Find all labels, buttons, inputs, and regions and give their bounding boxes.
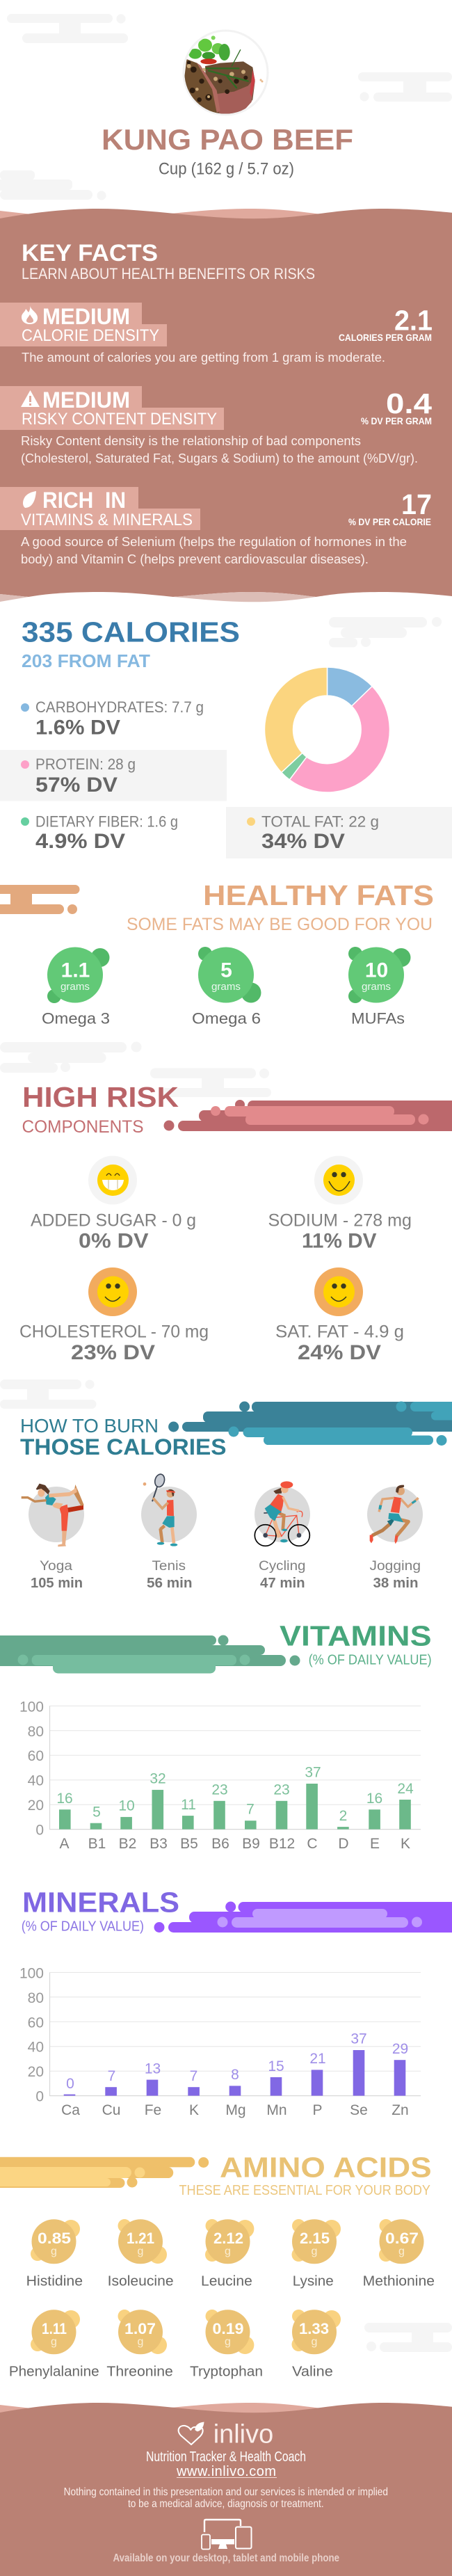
fat: omega 3: Omega 3 — [42, 1010, 110, 1027]
fat: omega 3 — [42, 947, 110, 1027]
decoration: purple cloud — [154, 1902, 452, 1933]
component: added sugar: ADDED SUGAR - 0 g — [31, 1210, 196, 1230]
amino: isoleucine: g — [138, 2246, 143, 2257]
chart: minerals bar chart: Fe — [145, 2102, 161, 2118]
heading: how to burn: HOW TO BURN — [20, 1415, 159, 1437]
panel: key facts — [0, 209, 452, 602]
amino: leucine: Leucine — [201, 2273, 252, 2289]
chart: minerals bar chart: 8 — [231, 2067, 239, 2083]
amino: phenylalanine: g — [51, 2336, 57, 2348]
chart: vitamins bar chart: D — [338, 1836, 349, 1852]
panel: calories — [0, 616, 452, 858]
availability note: Available on your desktop, tablet and mobile phone — [113, 2552, 339, 2564]
legend: carbohydrates: CARBOHYDRATES: 7.7 g — [35, 698, 204, 716]
chart: vitamins bar chart: 16 — [366, 1791, 382, 1807]
chart: minerals bar chart: Zn — [392, 2102, 409, 2118]
chart: vitamins bar chart: 80 — [28, 1724, 44, 1740]
amino: tryptophan — [190, 2310, 263, 2379]
fat: omega 6: 5 — [220, 959, 232, 982]
heading: minerals: MINERALS — [22, 1887, 179, 1919]
legend: protein — [0, 750, 227, 801]
activity: yoga: 105 min — [31, 1576, 83, 1591]
amino: valine: Valine — [292, 2364, 333, 2379]
amino: phenylalanine — [9, 2310, 99, 2379]
amino: tryptophan: Tryptophan — [190, 2364, 263, 2379]
chart: vitamins bar chart: 23 — [211, 1782, 228, 1798]
amino: lysine — [292, 2219, 341, 2289]
unit: % DV PER GRAM — [361, 415, 432, 426]
description: A good source of Selenium (helps the regulation of hormones in the — [21, 535, 407, 549]
label: risky content density: RISKY CONTENT DENSITY — [22, 410, 217, 429]
header: food photo — [184, 31, 268, 115]
amino: phenylalanine: Phenylalanine — [9, 2364, 99, 2379]
activity: jogging: 38 min — [373, 1576, 419, 1591]
chart: minerals bar chart: Ca — [61, 2102, 80, 2118]
legend: carbohydrates: 1.6% DV — [35, 717, 120, 739]
chart: vitamins bar chart: 7 — [246, 1802, 255, 1817]
amino: threonine: 1.07 — [124, 2320, 156, 2337]
chart: vitamins bar chart: E — [370, 1836, 380, 1852]
amino: lysine: 2.15 — [300, 2230, 330, 2247]
subheading: key facts: LEARN ABOUT HEALTH BENEFITS OR RISKS — [22, 265, 315, 282]
panel: high risk components — [19, 1081, 452, 1364]
unit: % DV PER CALORIE — [348, 516, 431, 527]
chart: vitamins bar chart: 40 — [28, 1773, 44, 1789]
legend: protein: 57% DV — [35, 774, 118, 797]
legend: total fat — [226, 807, 452, 858]
icon: flame — [22, 305, 38, 324]
amino: leucine: 2.12 — [213, 2230, 243, 2247]
heading: healthy fats: HEALTHY FATS — [203, 879, 434, 911]
activity: jogging — [367, 1485, 423, 1591]
heading: vitamins: VITAMINS — [280, 1620, 432, 1652]
amino: methionine: 0.67 — [385, 2230, 419, 2247]
activity: jogging: Jogging — [370, 1559, 421, 1574]
amino: isoleucine: 1.21 — [127, 2230, 154, 2247]
chart: minerals bar chart: 7 — [108, 2068, 115, 2084]
chart: minerals bar chart: P — [312, 2102, 323, 2118]
component: saturated fat: 24% DV — [298, 1341, 381, 1364]
tagline: Nutrition Tracker & Health Coach — [146, 2449, 306, 2465]
subheading: from fat: 203 FROM FAT — [22, 650, 150, 671]
legend: protein: PROTEIN: 28 g — [35, 755, 136, 773]
chart: vitamins bar chart: 100 — [19, 1699, 44, 1715]
title: KUNG PAO BEEF — [102, 123, 353, 156]
fact: calorie density — [0, 303, 433, 365]
description: body) and Vitamin C (helps prevent cardiovascular diseases). — [21, 552, 369, 566]
amino: threonine: Threonine — [106, 2364, 173, 2379]
chart: minerals bar chart: 15 — [268, 2058, 284, 2074]
amino: histidine: Histidine — [26, 2273, 83, 2289]
activity: tennis: 56 min — [147, 1576, 192, 1591]
legend: dietary fiber — [21, 813, 178, 853]
heading: those calories: THOSE CALORIES — [20, 1434, 227, 1459]
amino: tryptophan: 0.19 — [213, 2320, 243, 2337]
chart: vitamins bar chart: B5 — [180, 1836, 198, 1852]
decoration: orange cloud — [0, 885, 79, 914]
panel: vitamins — [0, 1620, 432, 1852]
panel: minerals — [19, 1887, 452, 2118]
subheading: SOME FATS MAY BE GOOD FOR YOU — [127, 915, 433, 934]
heading: calories: 335 CALORIES — [22, 616, 240, 648]
heading: key facts: KEY FACTS — [22, 240, 158, 266]
chart: vitamins bar chart: B1 — [88, 1836, 106, 1852]
amino: leucine — [201, 2219, 254, 2289]
chart: minerals bar chart: Mg — [225, 2102, 246, 2118]
chart: minerals bar chart: 0 — [35, 2089, 44, 2105]
chart: minerals bar chart: 37 — [350, 2031, 367, 2047]
decoration: red cloud — [164, 1100, 452, 1131]
chart: vitamins bar chart: B3 — [150, 1836, 168, 1852]
subheading: daily value: (% OF DAILY VALUE) — [309, 1653, 432, 1668]
chart: vitamins bar chart: 32 — [150, 1771, 166, 1786]
fat: omega 6 — [192, 947, 261, 1027]
chart: minerals bar chart — [19, 1965, 421, 2118]
component: sodium: SODIUM - 278 mg — [268, 1210, 412, 1230]
description — [21, 535, 407, 566]
disclaimer: Nothing contained in this presentation and our services is intended or implied — [64, 2486, 388, 2498]
component: sodium — [268, 1156, 412, 1252]
icon: warning — [21, 390, 40, 407]
fat: mufas: 10 — [365, 959, 388, 982]
component: cholesterol — [19, 1267, 209, 1364]
value: 17: 17 — [401, 488, 432, 520]
chart: vitamins bar chart: 0 — [35, 1823, 44, 1839]
subheading: components: COMPONENTS — [22, 1117, 143, 1137]
chart: minerals bar chart: 29 — [392, 2041, 408, 2057]
amino: methionine: g — [398, 2246, 405, 2257]
amino: histidine: g — [51, 2246, 57, 2257]
amino: valine: 1.33 — [299, 2320, 329, 2337]
fat: omega 6: Omega 6 — [192, 1010, 261, 1027]
chart: vitamins bar chart: 24 — [397, 1781, 414, 1797]
amino: methionine: Methionine — [363, 2273, 435, 2289]
icon: steak with greens — [184, 35, 255, 113]
label: calorie density: CALORIE DENSITY — [22, 326, 159, 345]
chart: minerals bar chart: 20 — [28, 2064, 44, 2080]
heading: high risk: HIGH RISK — [22, 1081, 179, 1113]
amino: valine — [292, 2310, 341, 2379]
description: The amount of calories you are getting from 1 gram is moderate. — [22, 351, 385, 365]
fat: mufas: grams — [362, 981, 391, 993]
subheading: daily value: (% OF DAILY VALUE) — [22, 1919, 144, 1934]
chart: vitamins bar chart: K — [401, 1836, 410, 1852]
chart: vitamins bar chart: B12 — [269, 1836, 295, 1852]
label: medium: MEDIUM — [42, 387, 130, 413]
fact: risky content density — [0, 386, 432, 465]
amino: valine: g — [312, 2336, 317, 2348]
chart: minerals bar chart: 0 — [66, 2076, 74, 2092]
legend: total fat: 34% DV — [261, 830, 345, 853]
amino: isoleucine — [108, 2219, 174, 2289]
activity: cycling: Cycling — [259, 1559, 306, 1574]
disclaimer — [64, 2486, 388, 2510]
footer — [0, 2403, 452, 2576]
amino: isoleucine: Isoleucine — [108, 2273, 174, 2289]
fat: omega 3: 1.1 — [61, 959, 90, 982]
chart: vitamins bar chart: 20 — [28, 1798, 44, 1814]
chart: minerals bar chart: 100 — [19, 1965, 44, 1981]
chart: minerals bar chart: 60 — [28, 2015, 44, 2031]
legend: dietary fiber: 4.9% DV — [35, 830, 125, 853]
chart: minerals bar chart: Se — [350, 2102, 368, 2118]
heading: amino acids: AMINO ACIDS — [220, 2152, 432, 2184]
legend: dietary fiber: DIETARY FIBER: 1.6 g — [35, 813, 178, 831]
logo: inlivo — [179, 2420, 273, 2449]
amino: lysine: Lysine — [293, 2273, 334, 2289]
chart: vitamins bar chart: 5 — [92, 1805, 101, 1820]
amino: tryptophan: g — [225, 2336, 231, 2348]
chart: vitamins bar chart: 2 — [339, 1808, 347, 1824]
chart: vitamins bar chart: 23 — [273, 1782, 290, 1798]
fat: omega 3: grams — [60, 981, 90, 993]
component: saturated fat — [275, 1267, 404, 1364]
label: medium: MEDIUM — [42, 304, 130, 329]
icon: tennis figure — [143, 1473, 177, 1546]
amino: phenylalanine: 1.11 — [42, 2320, 67, 2337]
chart: minerals bar chart: 13 — [145, 2061, 161, 2077]
activity: tennis: Tenis — [152, 1559, 186, 1574]
icon: cyclist — [255, 1481, 309, 1546]
description: (Cholesterol, Saturated Fat, Sugars & Sodium) to the amount (%DV/gr). — [21, 451, 418, 465]
chart: minerals bar chart: Cu — [102, 2102, 120, 2118]
label: vitamins and minerals: VITAMINS & MINERALS — [21, 511, 193, 529]
chart: vitamins bar chart: 60 — [28, 1748, 44, 1764]
component: cholesterol: CHOLESTEROL - 70 mg — [19, 1322, 209, 1341]
description: Risky Content density is the relationship of bad components — [21, 434, 361, 448]
icon: runner — [370, 1485, 419, 1544]
value: 0.4: 0.4 — [386, 387, 432, 419]
chart: vitamins bar chart: 10 — [118, 1798, 135, 1814]
activity: cycling: 47 min — [260, 1576, 305, 1591]
decoration: teal cloud — [168, 1401, 452, 1446]
chart: macronutrient donut — [265, 667, 389, 792]
value: 2.1: 2.1 — [394, 305, 433, 337]
chart: minerals bar chart: Mn — [266, 2102, 287, 2118]
chart: vitamins bar chart: B6 — [211, 1836, 229, 1852]
fact: rich in vitamins and minerals — [0, 487, 432, 566]
subheading: THESE ARE ESSENTIAL FOR YOUR BODY — [179, 2183, 430, 2198]
icon: leaf — [23, 491, 36, 508]
description — [21, 434, 418, 465]
chart: vitamins bar chart: A — [59, 1836, 70, 1852]
activity: yoga: Yoga — [40, 1559, 72, 1574]
chart: vitamins bar chart: 16 — [56, 1791, 73, 1807]
chart: minerals bar chart: K — [189, 2102, 199, 2118]
serving size: Cup (162 g / 5.7 oz) — [159, 160, 294, 178]
panel: healthy fats — [0, 879, 434, 1027]
amino: threonine — [106, 2310, 173, 2379]
decoration: green cloud — [0, 1635, 300, 1674]
fat: mufas — [348, 947, 410, 1027]
legend: total fat: TOTAL FAT: 22 g — [261, 813, 379, 831]
activity: tennis — [141, 1473, 197, 1591]
panel: how to burn calories — [20, 1401, 452, 1591]
amino: lysine: g — [312, 2246, 317, 2257]
icon: yoga figure — [22, 1484, 84, 1546]
disclaimer: to be a medical advice, diagnosis or treatment. — [128, 2498, 324, 2510]
logo: inlivo: inlivo — [213, 2420, 273, 2449]
label: rich in: RICH IN — [42, 488, 126, 513]
chart: minerals bar chart: 80 — [28, 1990, 44, 2006]
decoration: yellow cloud — [0, 2157, 209, 2188]
unit: CALORIES PER GRAM — [339, 332, 432, 343]
chart: vitamins bar chart: 11 — [181, 1797, 196, 1813]
icon: desktop, tablet and phone — [202, 2520, 252, 2549]
component: added sugar: 0% DV — [79, 1230, 149, 1252]
amino: histidine — [26, 2219, 83, 2289]
chart: minerals bar chart: 7 — [190, 2068, 197, 2084]
fat: omega 6: grams — [211, 981, 241, 993]
amino: histidine: 0.85 — [38, 2230, 71, 2247]
chart: vitamins bar chart: C — [307, 1836, 318, 1852]
website: www.inlivo.com — [176, 2464, 276, 2479]
amino: methionine — [363, 2219, 435, 2289]
chart: minerals bar chart: 40 — [28, 2040, 44, 2056]
component: added sugar — [31, 1156, 196, 1252]
chart: vitamins bar chart: B9 — [242, 1836, 260, 1852]
component: cholesterol: 23% DV — [71, 1341, 155, 1364]
chart: vitamins bar chart — [19, 1699, 421, 1852]
chart: minerals bar chart: 21 — [309, 2051, 326, 2067]
activity: cycling — [255, 1481, 310, 1591]
chart: vitamins bar chart: B2 — [119, 1836, 136, 1852]
component: saturated fat: SAT. FAT - 4.9 g — [275, 1322, 404, 1341]
legend: carbohydrates — [21, 698, 204, 739]
fat: mufas: MUFAs — [351, 1010, 405, 1027]
amino: leucine: g — [225, 2246, 231, 2257]
chart: vitamins bar chart: 37 — [305, 1764, 321, 1781]
component: sodium: 11% DV — [302, 1230, 377, 1252]
amino: threonine: g — [138, 2336, 143, 2348]
panel: amino acids — [0, 2152, 435, 2379]
activity: yoga — [22, 1484, 84, 1591]
